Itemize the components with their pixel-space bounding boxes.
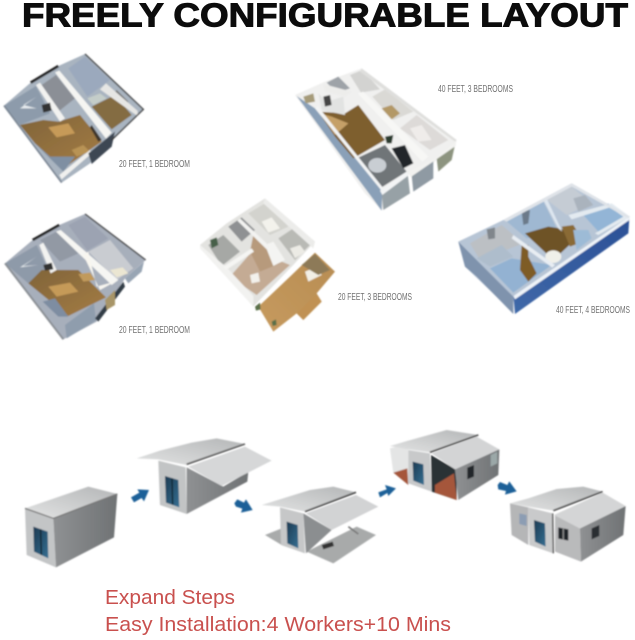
step 1: closed container: [25, 487, 117, 567]
step 4: walls raised: [390, 430, 499, 500]
floor plan: 20 feet 1 bedroom, bottom: [5, 214, 146, 339]
arrow 4: [498, 481, 517, 495]
floor plan: 40 feet 3 bedrooms: [295, 68, 457, 211]
caption: expand steps: [105, 587, 451, 636]
step 2: roof lifted: [137, 438, 272, 514]
floor plan: 20 feet 3 bedrooms with deck: [200, 198, 335, 332]
arrow 3: [378, 485, 396, 497]
label: 20 feet 3 bedrooms: 20 FEET, 3 BEDROOMS: [338, 292, 412, 303]
arrow 1: [131, 489, 149, 502]
floor plan: 20 feet 1 bedroom, top: [4, 54, 143, 183]
label: 20 feet 1 bedroom, top: 20 FEET, 1 BEDROOM: [119, 159, 190, 170]
floor plan: 40 feet 4 bedrooms: [458, 183, 630, 314]
arrow 2: [234, 499, 253, 513]
step 5: finished house: [510, 487, 626, 562]
step 3: floors unfolded: [262, 487, 378, 563]
caption: expand steps: Easy Installation:4 Workers+10 Mins: [105, 614, 451, 636]
label: 20 feet 1 bedroom, bottom: 20 FEET, 1 BEDROOM: [119, 325, 190, 336]
label: 40 feet 3 bedrooms: 40 FEET, 3 BEDROOMS: [438, 84, 513, 95]
caption: expand steps: Expand Steps: [105, 587, 235, 609]
